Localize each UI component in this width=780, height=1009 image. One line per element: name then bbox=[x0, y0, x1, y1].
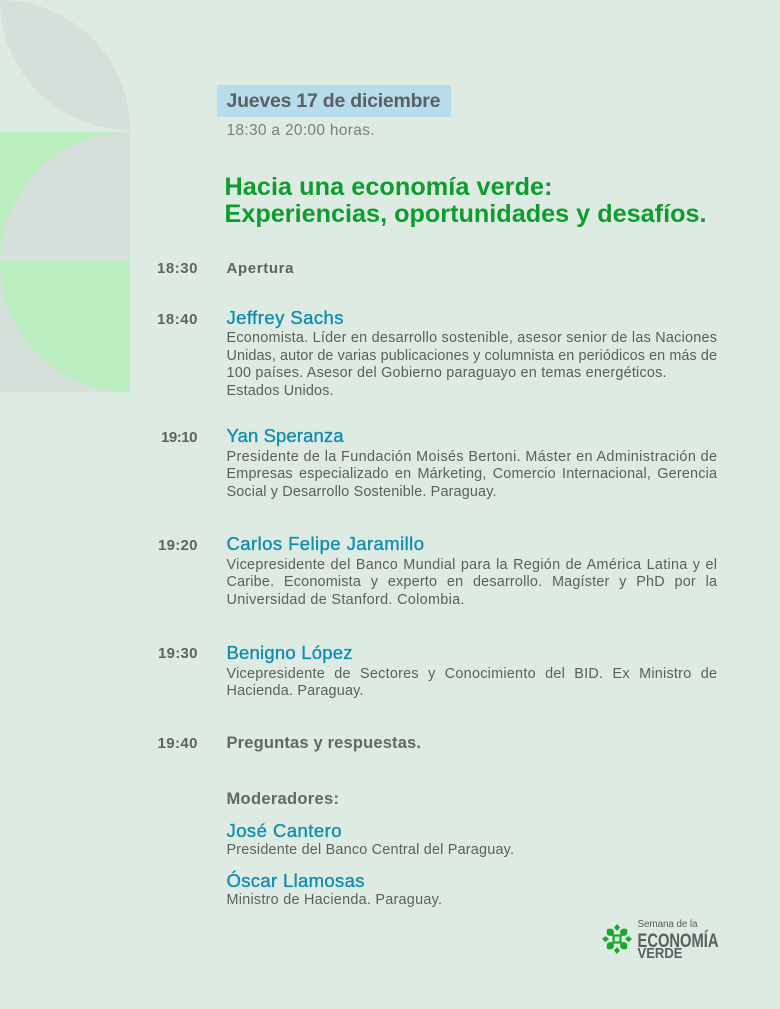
logo wordmark bbox=[638, 919, 718, 962]
agenda item: Benigno López: 19:30 bbox=[158, 645, 198, 662]
agenda item: Carlos Felipe Jaramillo bbox=[158, 533, 717, 608]
date heading: Jueves 17 de diciembre bbox=[226, 90, 441, 112]
agenda item: Benigno López bbox=[158, 642, 717, 699]
logo wordmark: Semana de la bbox=[638, 919, 698, 930]
agenda item: Jeffrey Sachs: Economista. Líder en desarrollo sostenible, asesor senior de las Naciones bbox=[226, 330, 717, 346]
agenda item: Yan Speranza: Social y Desarrollo Sostenible. Paraguay. bbox=[226, 484, 496, 500]
agenda item: Carlos Felipe Jaramillo: 19:20 bbox=[158, 537, 198, 554]
agenda item: preguntas y respuestas: 19:40 bbox=[158, 735, 198, 752]
agenda item: Carlos Felipe Jaramillo: Universidad de Stanford. Colombia. bbox=[226, 592, 464, 608]
agenda item: Carlos Felipe Jaramillo: Caribe. Economista y experto en desarrollo. Magíster y PhD por la bbox=[226, 574, 717, 590]
agenda item: Yan Speranza bbox=[161, 425, 717, 500]
moderator: José Cantero: José Cantero bbox=[226, 820, 342, 841]
moderator: Óscar Llamosas bbox=[226, 870, 442, 908]
agenda item: Carlos Felipe Jaramillo: Vicepresidente del Banco Mundial para la Región de América Latina y el bbox=[226, 557, 717, 573]
agenda item: Jeffrey Sachs: Estados Unidos. bbox=[226, 383, 334, 399]
agenda item: Jeffrey Sachs bbox=[157, 307, 717, 399]
icon: green flower bbox=[602, 924, 632, 954]
moderator: José Cantero bbox=[226, 820, 514, 858]
agenda item: apertura: 18:30 bbox=[157, 260, 198, 277]
title bbox=[224, 173, 706, 228]
agenda item: Benigno López: Hacienda. Paraguay. bbox=[226, 683, 364, 699]
decorative shapes: leaf and quarter circles bbox=[0, 0, 130, 392]
title: Experiencias, oportunidades y desafíos. bbox=[224, 200, 706, 228]
agenda item: Yan Speranza: 19:10 bbox=[161, 429, 198, 446]
agenda item: Jeffrey Sachs: Jeffrey Sachs bbox=[226, 307, 344, 328]
agenda item: preguntas y respuestas: Preguntas y respuestas. bbox=[226, 734, 421, 752]
agenda item: Yan Speranza: Yan Speranza bbox=[226, 425, 344, 446]
logo: Semana de la Economía Verde bbox=[602, 919, 718, 962]
moderators heading: Moderadores: bbox=[226, 790, 339, 808]
moderator: Óscar Llamosas: Ministro de Hacienda. Paraguay. bbox=[226, 892, 442, 908]
agenda item: Benigno López: Vicepresidente de Sectores y Conocimiento del BID. Ex Ministro de bbox=[226, 666, 717, 682]
agenda item: Jeffrey Sachs: 18:40 bbox=[157, 311, 198, 328]
moderator: Óscar Llamosas: Óscar Llamosas bbox=[226, 870, 364, 891]
moderator: José Cantero: Presidente del Banco Central del Paraguay. bbox=[226, 842, 514, 858]
logo wordmark: VERDE bbox=[638, 946, 683, 962]
date heading bbox=[217, 85, 451, 117]
agenda item: apertura: Apertura bbox=[226, 260, 294, 277]
agenda item: Jeffrey Sachs: 100 países. Asesor del Gobierno paraguayo en temas energéticos. bbox=[226, 365, 666, 381]
schedule hours: 18:30 a 20:00 horas. bbox=[226, 122, 374, 139]
agenda item: Jeffrey Sachs: Unidas, autor de varias publicaciones y columnista en periódicos en más de bbox=[226, 348, 717, 364]
agenda item: apertura bbox=[157, 260, 294, 277]
agenda item: Benigno López: Benigno López bbox=[226, 642, 352, 663]
logo wordmark: ECONOMÍA bbox=[638, 929, 718, 952]
title: Hacia una economía verde: bbox=[224, 173, 552, 201]
agenda item: Yan Speranza: Presidente de la Fundación Moisés Bertoni. Máster en Administración de bbox=[226, 449, 717, 465]
agenda item: Carlos Felipe Jaramillo: Carlos Felipe Jaramillo bbox=[226, 533, 424, 554]
agenda item: Yan Speranza: Empresas especializado en Márketing, Comercio Internacional, Gerencia bbox=[226, 466, 717, 482]
